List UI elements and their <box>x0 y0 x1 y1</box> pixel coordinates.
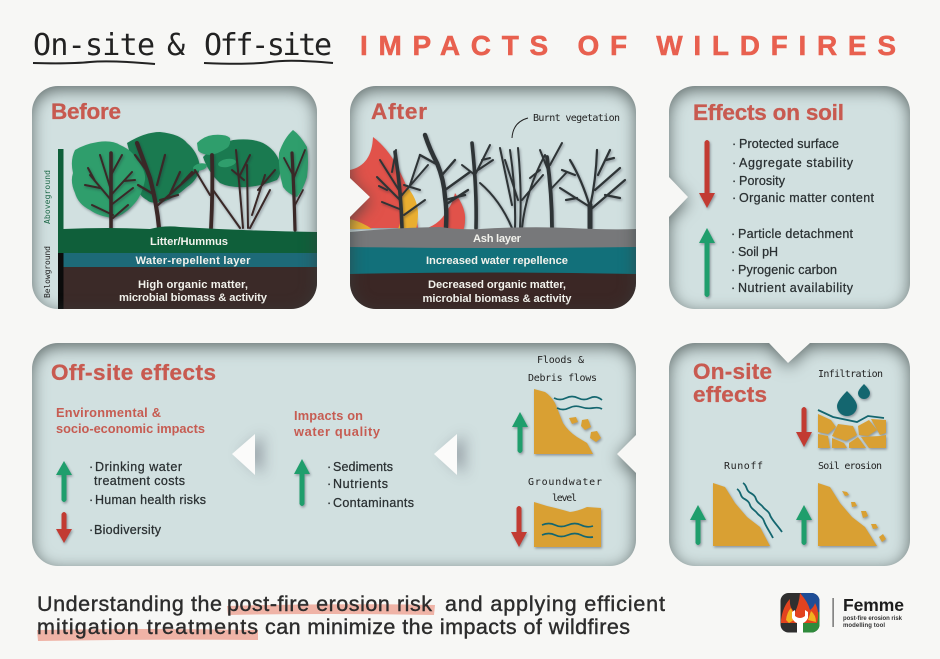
heading: after: After <box>371 99 427 124</box>
list: impacts: Drinking water <box>95 460 182 474</box>
title: on-site and off-site handwritten: & <box>167 28 185 63</box>
icon group: runoff: Runoff <box>724 461 763 472</box>
footer statement: and applying efficient <box>445 592 665 616</box>
heading: on-site effects: On-site <box>693 359 772 384</box>
list: increased properties: · <box>731 227 735 241</box>
layer: increased water repellence <box>350 247 636 274</box>
footer statement: can minimize the impacts of wildfires <box>265 615 630 639</box>
soil layers: after <box>350 227 636 309</box>
arrow: increase <box>796 505 812 545</box>
footer statement: Understanding the <box>37 592 222 616</box>
footer statement: mitigation treatments <box>37 615 258 639</box>
layer: water-repellent <box>63 253 317 268</box>
layer: decreased organic matter: microbial biomass & activity <box>422 293 572 305</box>
panel: after <box>350 86 636 309</box>
list: water quality: Contaminants <box>333 496 414 510</box>
arrow: decrease <box>699 140 715 208</box>
layer: organic matter: High organic matter, <box>138 279 248 291</box>
layer: organic matter <box>63 267 317 309</box>
list: decreased properties: Porosity <box>739 174 786 188</box>
list: water quality: · <box>327 477 331 491</box>
icon: water waves <box>554 396 602 410</box>
column: impacts on water quality: Impacts on <box>294 408 363 423</box>
list: water quality <box>327 460 414 510</box>
icon group: floods and debris flows: Floods & <box>537 355 584 366</box>
column: impacts on water quality <box>293 408 414 510</box>
layer: decreased organic matter <box>350 272 636 309</box>
list: decreased properties: · <box>732 174 736 188</box>
column: environmental and socio-economic impacts <box>56 405 206 543</box>
panel: on-site effects <box>669 343 910 566</box>
heading: off-site effects: Off-site effects <box>51 360 216 385</box>
arrow: flow left 2 <box>434 434 457 475</box>
logo: femme: post-fire erosion risk <box>843 616 903 622</box>
list: decreased properties: · <box>732 137 736 151</box>
arrow: increase <box>690 505 706 545</box>
list: decreased properties: Aggregate stability <box>739 156 854 170</box>
icon: runoff streams <box>737 483 782 538</box>
title: impacts of wildfires: IMPACTS OF WILDFIRES <box>360 30 896 61</box>
logo: femme: modelling tool <box>843 623 885 629</box>
footer statement: post-fire erosion risk <box>227 592 432 616</box>
icon group: infiltration <box>796 369 886 448</box>
annotation: burnt vegetation: Burnt vegetation <box>533 113 620 124</box>
layer: ash <box>350 227 636 250</box>
layer: ash: Ash layer <box>473 233 522 245</box>
heading: before: Before <box>51 99 121 124</box>
icon: slope <box>818 483 877 546</box>
icon group: groundwater level: Groundwater <box>528 477 602 488</box>
logo: femme <box>780 593 904 632</box>
icon: cracked soil <box>818 414 886 448</box>
list: impacts: · <box>89 493 93 507</box>
icon group: floods and debris flows: Debris flows <box>528 373 597 384</box>
icon group: infiltration: Infiltration <box>818 369 883 380</box>
list: water quality: · <box>327 460 331 474</box>
list: decreased properties: · <box>732 191 736 205</box>
list: impacts: · <box>89 523 93 537</box>
title: on-site and off-site handwritten: Off-site <box>204 28 332 63</box>
title: on-site and off-site handwritten: On-site <box>33 28 155 63</box>
layer: increased water repellence: Increased water repellence <box>426 255 568 267</box>
arrow: increase <box>56 461 72 502</box>
list: increased properties: · <box>731 281 735 295</box>
list: water quality: · <box>327 496 331 510</box>
footer statement <box>37 592 665 641</box>
depth bar with labels <box>43 149 64 309</box>
icon: surface line <box>818 410 884 422</box>
list: impacts: · <box>89 460 93 474</box>
icon: slope <box>534 389 593 454</box>
icon group: soil erosion: Soil erosion <box>818 461 882 472</box>
icon: femme logo <box>780 593 820 632</box>
arrow: increase <box>699 228 715 297</box>
icon: ground block <box>534 502 601 547</box>
panel: off-site effects <box>32 343 636 566</box>
icon: debris rocks <box>569 417 601 442</box>
icon: groundwater waves <box>542 524 593 537</box>
list: increased properties: · <box>731 263 735 277</box>
icon: soil particles <box>842 491 886 542</box>
layer: decreased organic matter: Decreased organic matter, <box>428 279 566 291</box>
heading: effects on soil: Effects on soil <box>693 100 844 125</box>
list: decreased properties: Protected surface <box>739 137 839 151</box>
arrow: decrease <box>56 512 72 543</box>
list: impacts: Biodiversity <box>94 523 162 537</box>
column: environmental and socio-economic impacts: Environmental & <box>56 405 161 420</box>
panel: effects on soil <box>669 86 910 309</box>
list: decreased properties: · <box>732 156 736 170</box>
list: increased properties: Particle detachment <box>738 227 854 241</box>
list: impacts: treatment costs <box>94 474 185 488</box>
list: water quality: Sediments <box>333 460 393 474</box>
arrow: flow left 1 <box>232 434 255 475</box>
list: decreased properties: Organic matter content <box>739 191 875 205</box>
column: environmental and socio-economic impacts: socio-economic impacts <box>56 421 205 436</box>
list: increased properties: · <box>731 245 735 259</box>
icon: water drops <box>837 384 870 416</box>
annotation: burnt vegetation <box>512 113 620 138</box>
icon group: floods and debris flows <box>512 355 602 454</box>
layer: litter / hummus <box>63 226 317 254</box>
list: impacts: Human health risks <box>95 493 206 507</box>
list: increased properties: Nutrient availability <box>738 281 854 295</box>
list: increased properties: Soil pH <box>738 245 778 259</box>
icon group: groundwater level: level <box>552 493 577 504</box>
depth bar with labels: Belowground <box>43 246 52 298</box>
list: decreased properties <box>732 137 875 205</box>
icon: slope <box>713 483 770 546</box>
burnt trees <box>377 135 625 228</box>
depth bar with labels: Aboveground <box>43 170 52 224</box>
layer: litter / hummus: Litter/Hummus <box>150 236 228 248</box>
flames <box>350 137 465 231</box>
highlight strokes <box>37 604 435 641</box>
arrow: increase <box>294 459 310 506</box>
soil layers: before <box>63 226 317 309</box>
layer: water-repellent: Water-repellent layer <box>136 255 251 267</box>
trees: before <box>72 130 308 230</box>
arrow: decrease <box>511 506 527 547</box>
heading: on-site effects <box>693 359 772 407</box>
heading: on-site effects: effects <box>693 382 767 407</box>
icon group: groundwater level <box>511 477 602 547</box>
list: impacts <box>89 460 206 537</box>
icon group: soil erosion <box>796 461 886 546</box>
list: increased properties <box>731 227 854 295</box>
list: water quality: Nutrients <box>333 477 388 491</box>
list: increased properties: Pyrogenic carbon <box>738 263 837 277</box>
arrow: increase <box>512 412 528 453</box>
title: on-site and off-site handwritten <box>33 28 333 64</box>
title <box>33 28 896 64</box>
arrow: decrease <box>796 407 812 447</box>
layer: organic matter: microbial biomass & activity <box>119 292 268 304</box>
icon group: runoff <box>690 461 782 546</box>
panel: before <box>32 86 317 309</box>
logo: femme: Femme <box>843 595 904 615</box>
column: impacts on water quality: water quality <box>293 424 381 439</box>
